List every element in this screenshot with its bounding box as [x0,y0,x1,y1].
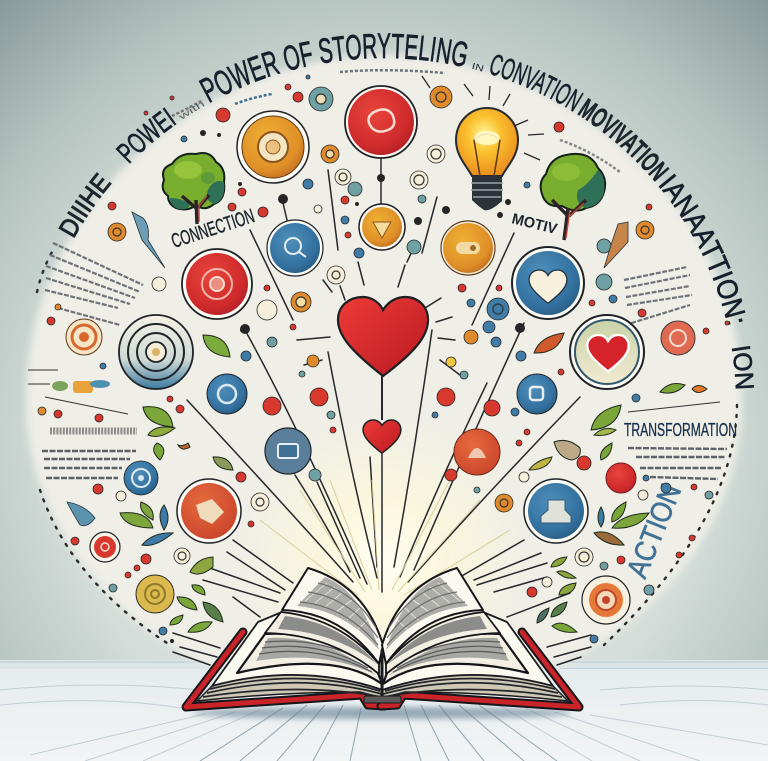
label: action: ACTION [621,479,688,583]
badge: blue lower right [524,479,588,543]
arc word: tiny in: IN [472,62,484,72]
leaves [120,333,707,632]
badge: yellow swirl [136,575,174,613]
left blue feather [67,502,95,526]
large red heart [338,297,428,376]
left half of book [186,568,384,707]
badge: blue small right [517,374,557,414]
cream story disc [26,55,742,665]
arc word: tiny with: with [179,102,204,119]
text block: left lower lines [42,431,137,478]
badge: orange pill [441,221,495,275]
floor [0,669,768,761]
right half of book [381,568,579,707]
text block: left grey lines [45,243,143,325]
badge: small red right [661,321,695,355]
light bulb [422,76,544,210]
badge: red top centre [345,86,417,158]
book spine [380,650,384,697]
right upper pen [604,222,628,268]
light glow from book [232,390,532,690]
open book [186,568,579,719]
badge: blue search [267,220,323,276]
arc word: Power: POWEI [116,107,176,164]
badge: red orange lower left [177,479,241,543]
badge: red target lower left [90,532,120,562]
heart pointer tip [381,376,383,420]
tree right [541,154,605,240]
tiny text-like dashes along arc [172,70,620,172]
badge: red heart on green [570,315,644,389]
badge: blue heart [512,247,584,319]
small red heart [363,420,401,453]
arc word: left fragment: DIIIHE [58,172,112,238]
baseboard [0,660,768,669]
left decorative blue orange bar [28,370,128,414]
tree left [163,153,224,224]
badge: orange shield [359,204,405,250]
badge: small orange left [66,319,102,355]
arc word: ion: ION [732,346,754,389]
arc word: motivation: MOVIVATION [577,98,670,182]
badge: red orange small [454,429,500,475]
badge: blue small left [207,374,247,414]
dotted disc edge [37,252,737,645]
badge: orange top left [237,111,309,183]
arc word: conversation: CONVATION [490,54,584,112]
badge: blue left small [124,461,158,495]
label: motivation: MOTIV [510,210,559,238]
text block: right grey lines [624,267,692,325]
title arc: Power of Storytelling: POWER OF STORYTELING [198,33,468,103]
pale light rays [260,480,510,595]
left upper pen [132,212,165,268]
badge: concentric target [119,315,193,389]
badge: red left [182,249,252,319]
small scattered dots [38,75,729,643]
arc word: inspiration fragment: IANAATTION: [658,174,746,325]
badge: blue screen [265,428,311,474]
badge: red small right [606,463,636,493]
radiating lines [173,157,591,665]
spine base [364,696,401,703]
label: connection: CONNECTION [169,205,257,253]
text block: right lower lines [628,402,727,479]
book shadow [192,707,572,719]
badge: orange target lower right [582,576,630,624]
